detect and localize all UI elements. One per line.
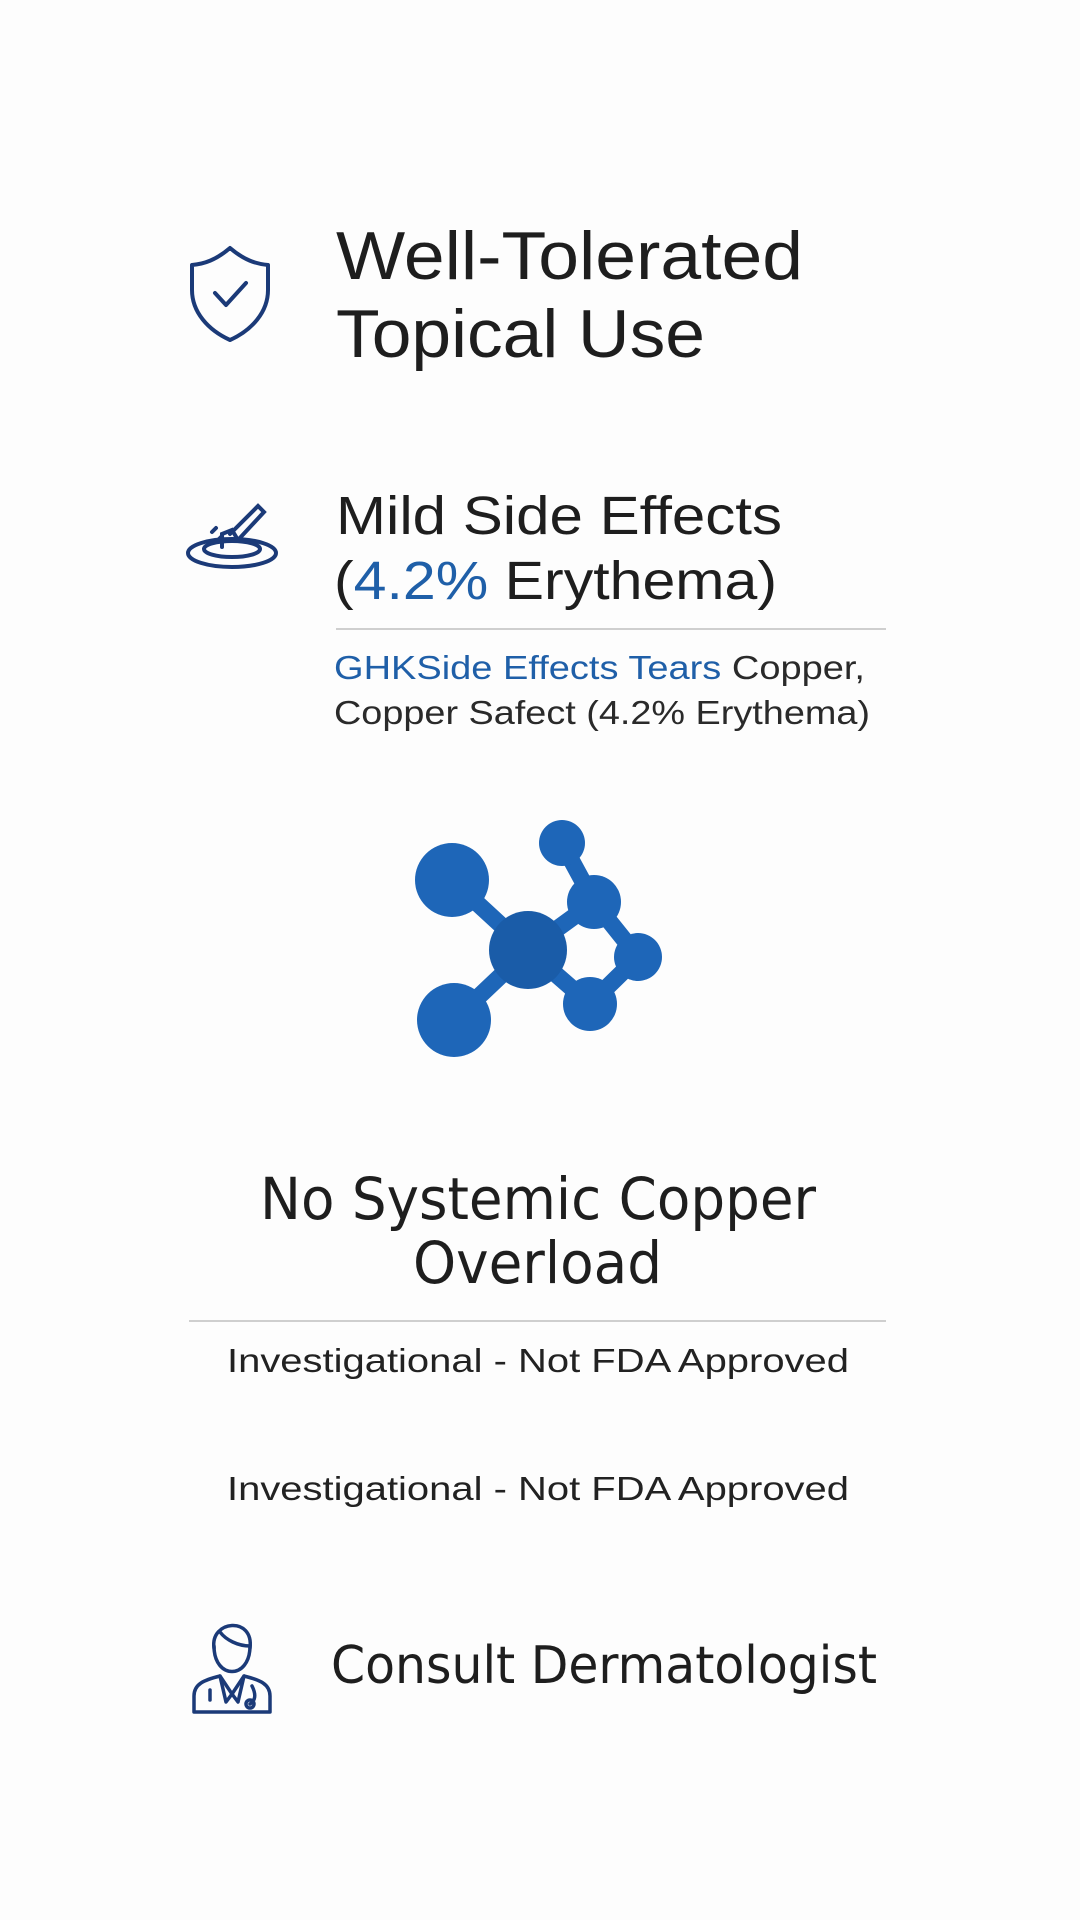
- heading: mild side effects: [334, 486, 782, 611]
- text block: GHK note: [334, 649, 870, 731]
- text: disclaimer 1: Investigational - Not FDA Approved: [227, 1342, 849, 1379]
- heading: no systemic copper overload: Overload: [413, 1229, 662, 1297]
- icon: skin application: [188, 506, 276, 567]
- icon: doctor: [194, 1625, 270, 1712]
- heading: mild side effects: Mild Side Effects: [336, 486, 782, 546]
- heading: well-tolerated: Topical Use: [336, 296, 705, 372]
- heading: consult dermatologist: Consult Dermatologist: [331, 1636, 877, 1696]
- icon: shield check: [192, 248, 268, 340]
- heading: well-tolerated: Well-Tolerated: [336, 218, 803, 294]
- heading: mild side effects: (4.2% Erythema): [334, 551, 777, 611]
- icon: molecule: [415, 820, 662, 1057]
- text: disclaimer 2: Investigational - Not FDA Approved: [227, 1470, 849, 1507]
- text block: GHK note: GHKSide Effects Tears Copper,: [334, 649, 865, 686]
- text block: GHK note: Copper Safect (4.2% Erythema): [334, 694, 870, 731]
- heading: no systemic copper overload: [260, 1165, 816, 1297]
- heading: well-tolerated: [336, 218, 803, 372]
- heading: no systemic copper overload: No Systemic Copper: [260, 1165, 816, 1233]
